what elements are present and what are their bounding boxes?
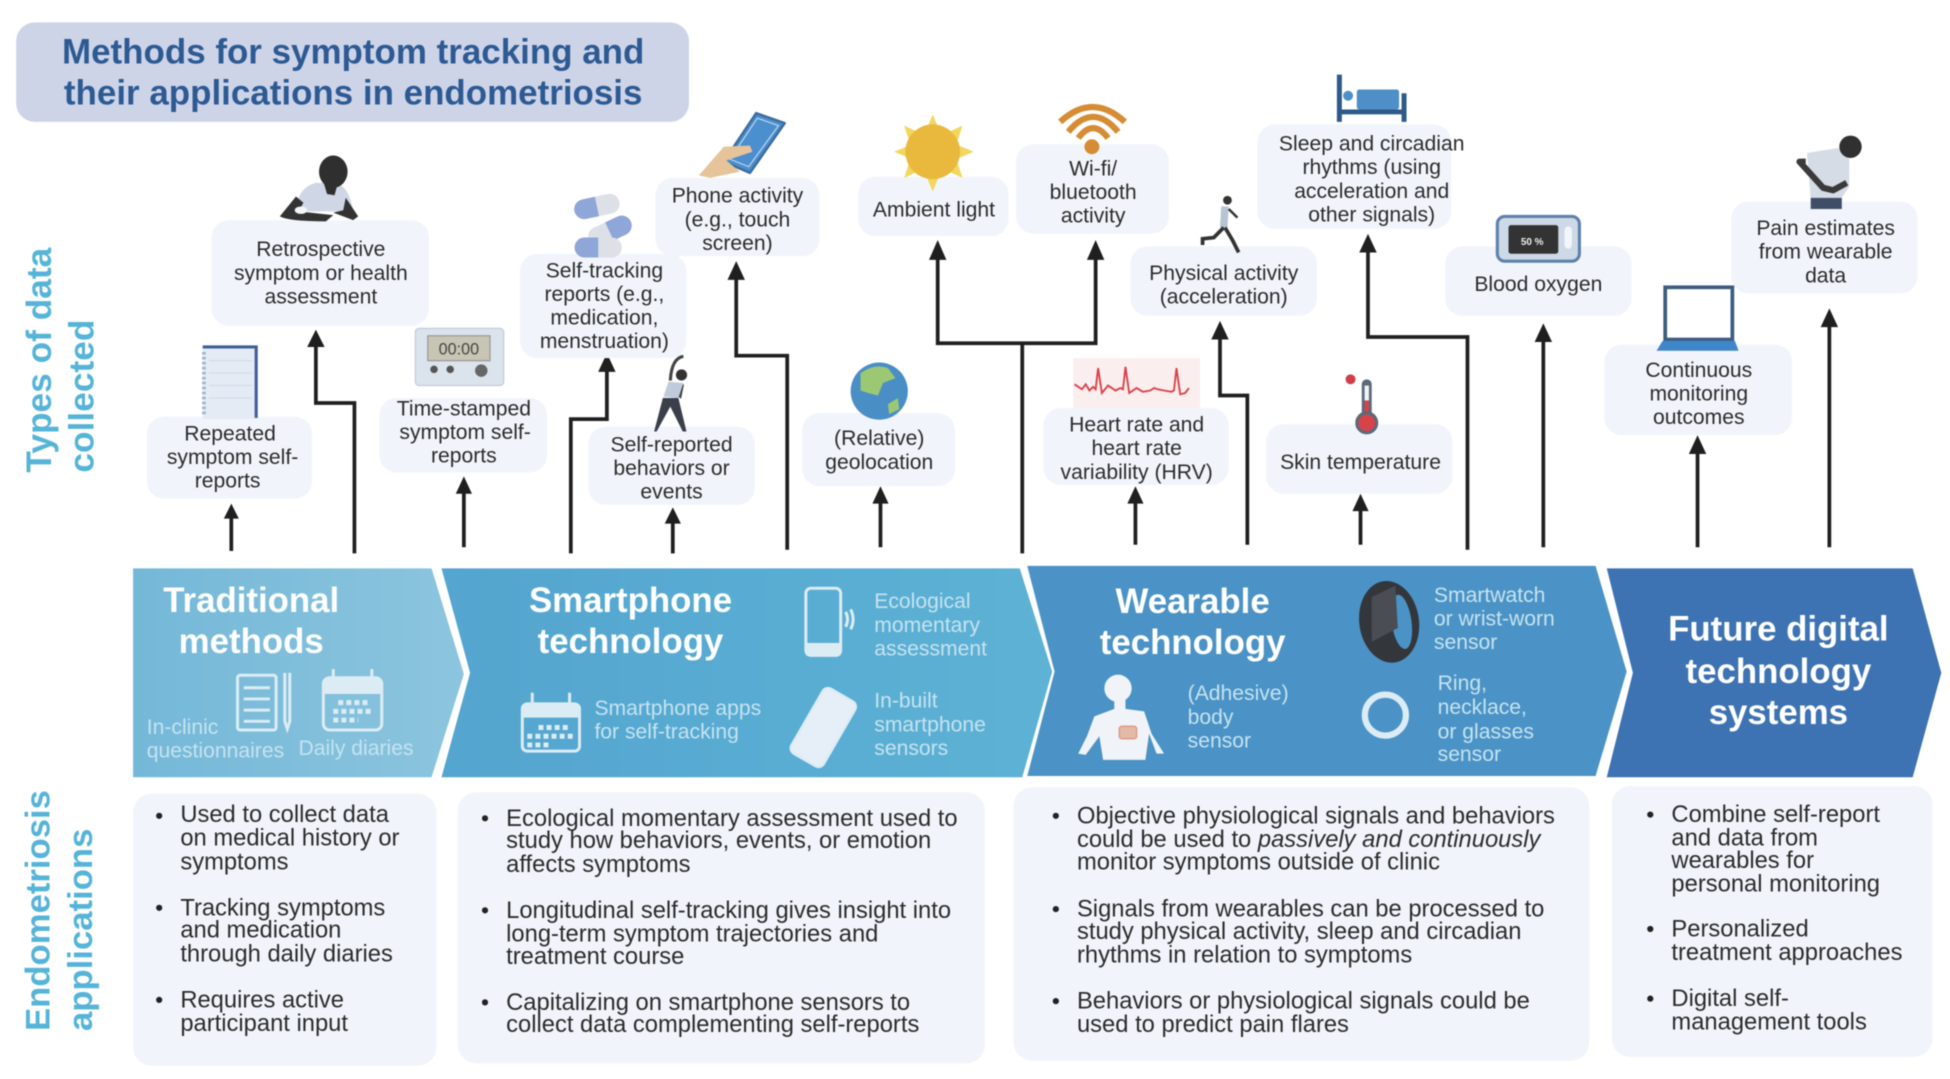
panel: future applications: Personalized bbox=[1671, 915, 1809, 942]
side heading: endometriosis applications: Endometriosis bbox=[20, 790, 58, 1031]
label: blood oxygen: Blood oxygen bbox=[1474, 273, 1602, 296]
icon: body sensor bbox=[1078, 675, 1164, 760]
chevron: smartphone technology: technology bbox=[538, 622, 724, 661]
chevron: traditional methods: methods bbox=[179, 622, 324, 661]
chevron: wearable technology: necklace, bbox=[1438, 696, 1527, 719]
chevron: wearable technology: Wearable bbox=[1116, 582, 1270, 621]
icon: timer: 00:00 bbox=[439, 340, 479, 358]
panel: wearable applications: Behaviors or physiological signals could be bbox=[1077, 988, 1530, 1015]
panel: smartphone applications: long-term symptom trajectories and bbox=[506, 920, 878, 947]
title: their applications in endometriosis bbox=[64, 73, 642, 112]
label: self-tracking reports: Self-tracking bbox=[546, 259, 663, 282]
panel: future applications: Digital self- bbox=[1671, 985, 1789, 1012]
chevron: smartphone technology: smartphone bbox=[874, 713, 986, 736]
panel: future applications: personal monitoring bbox=[1671, 871, 1880, 898]
label: ambient light bbox=[858, 177, 1009, 236]
label: relative geolocation bbox=[802, 413, 955, 486]
panel: future applications: management tools bbox=[1671, 1009, 1867, 1036]
icon: tilted smartphone bbox=[788, 686, 858, 769]
label: phone activity: Phone activity bbox=[672, 185, 804, 208]
panel: wearable applications: Signals from wearables can be processed to bbox=[1077, 896, 1544, 923]
panel: wearable applications bbox=[1014, 787, 1589, 1061]
label: physical activity: Physical activity bbox=[1149, 262, 1299, 285]
label: retrospective symptom or health assessment: assessment bbox=[264, 285, 377, 308]
icon: ring bbox=[1365, 695, 1406, 736]
panel: traditional applications bbox=[133, 793, 437, 1066]
label: phone activity: screen) bbox=[702, 232, 773, 255]
chevron: traditional methods: questionnaires bbox=[147, 739, 284, 762]
label: skin temperature bbox=[1266, 424, 1453, 494]
icon: person in pain bbox=[1800, 136, 1862, 209]
panel: wearable applications: could be used to passively and continuously bbox=[1077, 826, 1543, 853]
label: time-stamped symptom self-reports: symptom self- bbox=[399, 421, 531, 444]
panel: future applications: treatment approaches bbox=[1671, 939, 1903, 966]
label: self-reported behaviors or events: events bbox=[640, 481, 703, 504]
chevron: wearable technology bbox=[1027, 566, 1627, 776]
icon: pills bbox=[572, 192, 635, 257]
panel: traditional applications: Used to collect data bbox=[180, 801, 390, 828]
label: self-reported behaviors or events: behaviors or bbox=[613, 457, 730, 480]
label: repeated symptom self-reports bbox=[147, 417, 312, 499]
label: self-tracking reports bbox=[520, 254, 686, 358]
side heading: types of data collected: Types of data bbox=[20, 247, 59, 473]
label: pain estimates bbox=[1731, 201, 1918, 294]
chevron: wearable technology: or wrist-worn bbox=[1434, 608, 1555, 631]
panel: smartphone applications bbox=[458, 792, 985, 1063]
icon: smartwatch bbox=[1354, 577, 1424, 667]
icon: wifi bbox=[1060, 107, 1125, 154]
side heading: endometriosis applications: applications bbox=[62, 829, 100, 1031]
side heading: types of data collected: collected bbox=[62, 320, 101, 473]
chevron: traditional methods: Traditional bbox=[163, 581, 339, 620]
panel: smartphone applications: Capitalizing on smartphone sensors to bbox=[506, 989, 910, 1016]
chevron: wearable technology: technology bbox=[1100, 623, 1286, 662]
side heading: types of data collected bbox=[20, 247, 101, 473]
chevron: smartphone technology bbox=[441, 568, 1052, 777]
label: repeated symptom self-reports: Repeated bbox=[184, 422, 276, 445]
icon: laptop bbox=[1657, 287, 1739, 351]
label: self-tracking reports: medication, bbox=[550, 307, 658, 330]
panel: traditional applications: on medical history or bbox=[180, 825, 400, 852]
label: pain estimates: from wearable bbox=[1759, 241, 1893, 264]
chevron: future digital technology systems: Future digital bbox=[1668, 609, 1889, 648]
chevron: smartphone technology: In-built bbox=[874, 690, 938, 713]
panel: traditional applications: and medication bbox=[180, 917, 341, 944]
label: skin temperature: Skin temperature bbox=[1280, 451, 1441, 474]
label: continuous monitoring outcomes bbox=[1604, 344, 1792, 435]
label: sleep and circadian rhythms bbox=[1257, 124, 1464, 229]
icon: thermometer bbox=[1346, 374, 1377, 433]
icon: calendar bbox=[522, 693, 580, 751]
icon: notebook bbox=[203, 346, 257, 419]
panel: future applications: Combine self-report bbox=[1671, 801, 1880, 828]
panel: smartphone applications: study how behaviors, events, or emotion bbox=[506, 827, 931, 854]
panel: smartphone applications: collect data complementing self-reports bbox=[506, 1011, 919, 1038]
chevron: smartphone technology: Ecological bbox=[874, 590, 971, 613]
panel: traditional applications: participant input bbox=[180, 1010, 348, 1037]
label: physical activity: (acceleration) bbox=[1160, 285, 1288, 308]
chevron: smartphone technology: momentary bbox=[874, 614, 980, 637]
icon: pulse oximeter: 50 % bbox=[1521, 237, 1544, 248]
label: heart rate and HRV: variability (HRV) bbox=[1061, 461, 1213, 484]
label: wi-fi bluetooth activity: bluetooth bbox=[1050, 181, 1137, 204]
panel: smartphone applications: Ecological momentary assessment used to bbox=[506, 805, 958, 832]
title bbox=[16, 22, 689, 122]
panel: traditional applications: Tracking symptoms bbox=[180, 894, 385, 921]
label: continuous monitoring outcomes: monitoring bbox=[1649, 382, 1748, 405]
title: Methods for symptom tracking and bbox=[62, 32, 644, 71]
label: blood oxygen bbox=[1445, 246, 1632, 316]
chevron: traditional methods: In-clinic bbox=[147, 716, 218, 739]
panel: wearable applications: used to predict pain flares bbox=[1077, 1011, 1349, 1038]
icon: phone with signal bbox=[806, 588, 853, 655]
label: phone activity bbox=[655, 178, 820, 256]
label: relative geolocation: (Relative) bbox=[834, 427, 924, 450]
label: sleep and circadian rhythms: acceleration and bbox=[1294, 180, 1449, 203]
label: heart rate and HRV: heart rate bbox=[1091, 437, 1182, 460]
label: retrospective symptom or health assessment: Retrospective bbox=[256, 238, 385, 261]
chevron: wearable technology: (Adhesive) bbox=[1188, 682, 1289, 705]
label: ambient light: Ambient light bbox=[873, 198, 995, 221]
chevron: smartphone technology: assessment bbox=[874, 637, 987, 660]
panel: wearable applications: study physical activity, sleep and circadian bbox=[1077, 918, 1521, 945]
side heading: endometriosis applications bbox=[20, 790, 100, 1031]
label: self-tracking reports: reports (e.g., bbox=[545, 283, 664, 306]
panel: smartphone applications: affects symptoms bbox=[506, 851, 691, 878]
panel: wearable applications: rhythms in relation to symptoms bbox=[1077, 942, 1412, 969]
label: sleep and circadian rhythms: other signals) bbox=[1308, 203, 1435, 226]
icon: phone in hand bbox=[699, 113, 785, 178]
label: phone activity: (e.g., touch bbox=[685, 208, 790, 231]
panel: smartphone applications: Longitudinal self-tracking gives insight into bbox=[506, 897, 951, 924]
chevron: wearable technology: sensor bbox=[1438, 743, 1501, 766]
label: heart rate and HRV bbox=[1043, 408, 1229, 485]
panel: smartphone applications: treatment course bbox=[506, 943, 684, 970]
chevron: smartphone technology: for self-tracking bbox=[594, 721, 739, 744]
label: heart rate and HRV: Heart rate and bbox=[1069, 414, 1204, 437]
icon: clipboard bbox=[238, 673, 290, 730]
label: sleep and circadian rhythms: Sleep and circadian bbox=[1279, 132, 1464, 155]
label: relative geolocation: geolocation bbox=[825, 451, 933, 474]
chevron: traditional methods: Daily diaries bbox=[298, 737, 414, 760]
chevron: wearable technology: sensor bbox=[1188, 729, 1251, 752]
panel: wearable applications: monitor symptoms outside of clinic bbox=[1077, 848, 1440, 875]
chevron: future digital technology systems: technology bbox=[1686, 652, 1872, 691]
label: self-reported behaviors or events: Self-reported bbox=[610, 433, 733, 456]
label: time-stamped symptom self-reports: Time-stamped bbox=[397, 397, 531, 420]
icon: sun bbox=[894, 114, 974, 192]
icon: person at desk bbox=[280, 155, 358, 221]
icon: calendar bbox=[323, 669, 382, 730]
icon: stretching figure bbox=[654, 356, 687, 432]
label: retrospective symptom or health assessment: symptom or health bbox=[234, 262, 408, 285]
chevron: smartphone technology: sensors bbox=[874, 737, 948, 760]
arrows bbox=[224, 234, 1838, 553]
chevron: wearable technology: sensor bbox=[1434, 631, 1497, 654]
panel: traditional applications: Requires active bbox=[180, 986, 344, 1013]
icon: pulse oximeter bbox=[1497, 216, 1579, 261]
chevron: wearable technology: or glasses bbox=[1438, 721, 1534, 744]
label: wi-fi bluetooth activity bbox=[1016, 144, 1169, 234]
panel: traditional applications: through daily diaries bbox=[180, 940, 393, 967]
label: time-stamped symptom self-reports bbox=[379, 397, 547, 473]
chevron: wearable technology: Smartwatch bbox=[1434, 584, 1545, 607]
label: repeated symptom self-reports: symptom self- bbox=[167, 446, 298, 469]
chevron: wearable technology: body bbox=[1188, 706, 1234, 729]
label: retrospective symptom or health assessment bbox=[211, 220, 429, 326]
icon: timer bbox=[415, 328, 504, 386]
chevron: smartphone technology: Smartphone bbox=[529, 581, 732, 620]
label: pain estimates: data bbox=[1805, 264, 1846, 287]
chevron: future digital technology systems bbox=[1607, 568, 1941, 777]
label: time-stamped symptom self-reports: reports bbox=[431, 445, 497, 468]
chevron: traditional methods bbox=[133, 568, 464, 777]
label: repeated symptom self-reports: reports bbox=[195, 470, 260, 493]
panel: future applications bbox=[1612, 786, 1933, 1057]
icon: runner bbox=[1203, 196, 1239, 252]
icon: bed bbox=[1339, 75, 1404, 122]
panel: future applications: and data from bbox=[1671, 825, 1818, 852]
chevron: future digital technology systems: systems bbox=[1709, 693, 1848, 732]
chevron: smartphone technology: Smartphone apps bbox=[594, 697, 761, 720]
icon: ecg bbox=[1073, 358, 1200, 408]
label: continuous monitoring outcomes: outcomes bbox=[1653, 406, 1745, 429]
label: continuous monitoring outcomes: Continuous bbox=[1645, 359, 1752, 382]
label: wi-fi bluetooth activity: Wi-fi/ bbox=[1069, 157, 1117, 180]
label: physical activity bbox=[1130, 246, 1317, 316]
label: pain estimates: Pain estimates bbox=[1756, 217, 1895, 240]
label: wi-fi bluetooth activity: activity bbox=[1061, 205, 1126, 228]
panel: future applications: wearables for bbox=[1670, 847, 1814, 874]
label: self-tracking reports: menstruation) bbox=[540, 330, 669, 353]
icon: globe bbox=[851, 363, 908, 420]
label: self-reported behaviors or events bbox=[588, 427, 755, 505]
panel: wearable applications: Objective physiological signals and behaviors bbox=[1077, 802, 1555, 829]
panel: traditional applications: symptoms bbox=[180, 848, 289, 875]
chevron: wearable technology: Ring, bbox=[1438, 672, 1487, 695]
label: sleep and circadian rhythms: rhythms (using bbox=[1302, 156, 1441, 179]
